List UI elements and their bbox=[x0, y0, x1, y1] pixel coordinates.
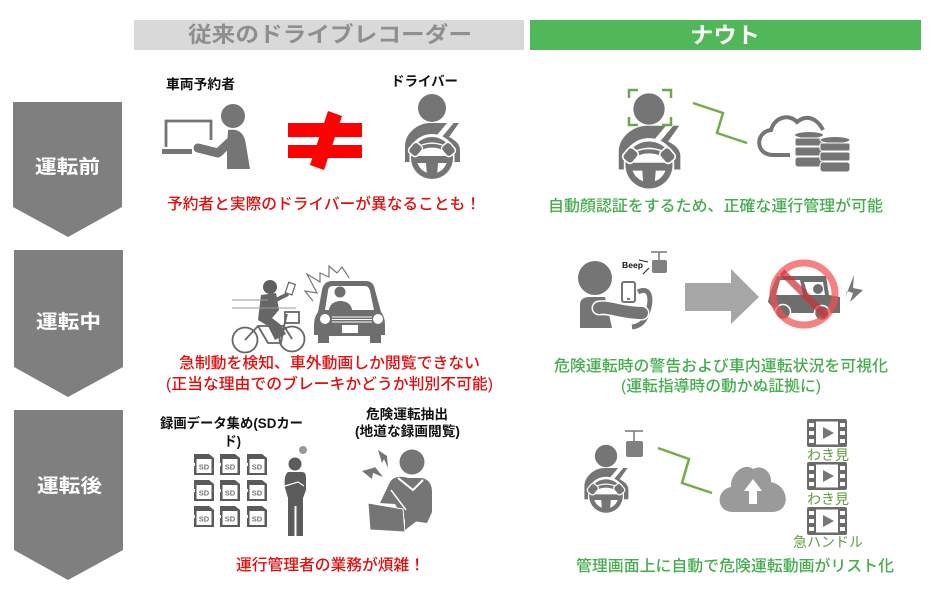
icon: cloud with databases bbox=[759, 117, 850, 172]
label: collect recorded data: 録画データ集め(SDカー bbox=[160, 415, 303, 431]
label: beep: Beep bbox=[622, 261, 643, 270]
text: warning and in-car visualisation: 危険運転時の警告および車内運転状況を可視化 bbox=[554, 356, 888, 375]
header: Nauto bbox=[530, 20, 921, 50]
icon: distracted cyclist bbox=[232, 280, 304, 352]
icon: stressed worker at laptop bbox=[362, 450, 432, 532]
text: warning and in-car visualisation: (運転指導時の動かぬ証拠に) bbox=[621, 377, 821, 395]
header: Nauto: ナウト bbox=[690, 23, 760, 48]
header: conventional dashcam bbox=[134, 20, 524, 50]
text: automatic video list: 管理画面上に自動で危険運転動画がリスト化 bbox=[576, 556, 894, 575]
text: only exterior video viewable bbox=[166, 354, 493, 393]
label: dangerous driving extraction: (地道な録画閲覧) bbox=[355, 423, 460, 439]
icon: driver with wheel bbox=[405, 94, 460, 182]
stage arrow: while driving: 運転中 bbox=[36, 311, 101, 333]
icon: driver with camera bbox=[584, 431, 643, 515]
label: dangerous driving extraction bbox=[355, 406, 460, 439]
icon: video 3 bbox=[807, 507, 847, 535]
header: conventional dashcam: 従来のドライブレコーダー bbox=[188, 22, 472, 47]
icon: prohibited dangerous driving bbox=[768, 263, 863, 325]
icon: driver using phone bbox=[578, 261, 650, 328]
label: vehicle booker: 車両予約者 bbox=[166, 76, 235, 92]
stage arrow: after driving: 運転後 bbox=[37, 475, 102, 497]
stage arrow: before driving: 運転前 bbox=[35, 156, 100, 178]
icon: wireless link bbox=[693, 103, 747, 143]
icon: wireless link bbox=[658, 448, 712, 493]
stage arrow: after driving bbox=[14, 410, 123, 580]
text: booker and driver can differ: 予約者と実際のドライバーが異なることも！ bbox=[167, 194, 481, 213]
icon: puzzled manager bbox=[285, 446, 307, 536]
stage arrow: before driving bbox=[13, 102, 122, 237]
icon: booker at laptop bbox=[162, 104, 250, 169]
label: dangerous driving extraction: 危険運転抽出 bbox=[366, 406, 448, 422]
text: warning and in-car visualisation bbox=[554, 356, 888, 395]
arrow bbox=[685, 269, 759, 324]
icon: not equal sign bbox=[288, 111, 362, 170]
text: only exterior video viewable: (正当な理由でのブレーキかどうか判別不可能) bbox=[166, 374, 493, 393]
icon: burst bbox=[305, 266, 349, 301]
text: automatic face recognition: 自動顔認証をするため、正確な運行管理が可能 bbox=[548, 196, 884, 215]
icon: cloud upload bbox=[720, 467, 786, 512]
icon: SD cards bbox=[194, 454, 267, 527]
label: looking aside 1: わき見 bbox=[807, 447, 849, 463]
label: driver: ドライバー bbox=[391, 74, 458, 89]
label: collect recorded data: ド) bbox=[224, 434, 241, 449]
label: sudden steering: 急ハンドル bbox=[793, 534, 863, 550]
text: only exterior video viewable: 急制動を検知、車外動画しか閲覧できない bbox=[179, 354, 480, 372]
text: manager workload complicated: 運行管理者の業務が煩雑！ bbox=[236, 555, 425, 574]
icon: car front bbox=[314, 281, 385, 343]
stage arrow: while driving bbox=[14, 250, 123, 397]
label: looking aside 2: わき見 bbox=[807, 491, 849, 507]
label: collect recorded data bbox=[160, 415, 303, 449]
icon: video 2 bbox=[807, 462, 847, 490]
icon: video 1 bbox=[807, 419, 847, 447]
icon: camera with beep lines bbox=[639, 252, 667, 274]
icon: driver with face recognition frame bbox=[619, 90, 680, 192]
